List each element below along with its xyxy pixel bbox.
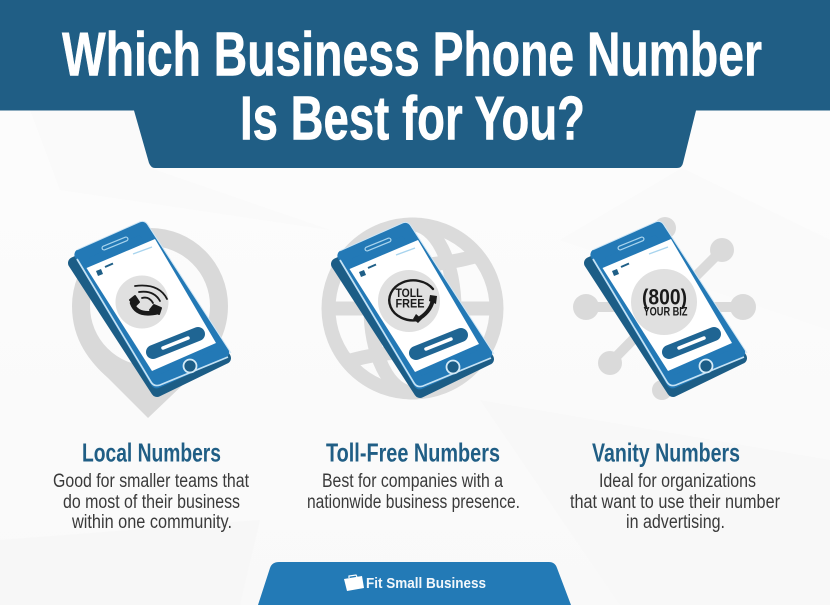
- panel: toll-free numbers: [307, 222, 520, 513]
- icon: phone with vanity number: (800): [642, 284, 687, 310]
- text block: do most of their business: [63, 492, 240, 513]
- heading: Toll-Free Numbers: [326, 438, 500, 468]
- text block: within one community.: [71, 512, 232, 533]
- icon: phone with toll free symbol: [337, 222, 494, 392]
- panel: local numbers: [53, 221, 250, 533]
- header banner: [0, 0, 830, 168]
- icon: phone with toll free symbol: FREE: [396, 296, 424, 310]
- footer tab: [258, 562, 571, 605]
- logo wordmark: Fit Small Business: [366, 575, 486, 592]
- text block: Best for companies with a: [322, 471, 503, 492]
- icon: phone with toll free symbol: TOLL: [396, 286, 422, 300]
- text block: [53, 471, 250, 533]
- icon: phone with vanity number: [590, 221, 747, 391]
- heading: Local Numbers: [82, 438, 221, 468]
- panel: vanity numbers: [570, 217, 781, 533]
- text block: nationwide business presence.: [307, 492, 520, 513]
- text block: in advertising.: [626, 512, 725, 533]
- text block: [570, 471, 781, 533]
- heading: Vanity Numbers: [592, 438, 740, 468]
- icon: phone with vanity number: YOUR BIZ: [644, 306, 688, 318]
- icon: phone with call symbol: [74, 221, 231, 391]
- icon: globe: [328, 224, 496, 392]
- text block: Ideal for organizations: [599, 471, 756, 492]
- title: Is Best for You?: [240, 84, 585, 154]
- title: [62, 20, 762, 154]
- text block: that want to use their number: [570, 492, 781, 513]
- text block: [307, 471, 520, 513]
- icon: briefcase logo: [344, 575, 364, 591]
- icon: network nodes: [573, 217, 756, 400]
- text block: Good for smaller teams that: [53, 471, 250, 492]
- icon: map pin: [72, 228, 228, 418]
